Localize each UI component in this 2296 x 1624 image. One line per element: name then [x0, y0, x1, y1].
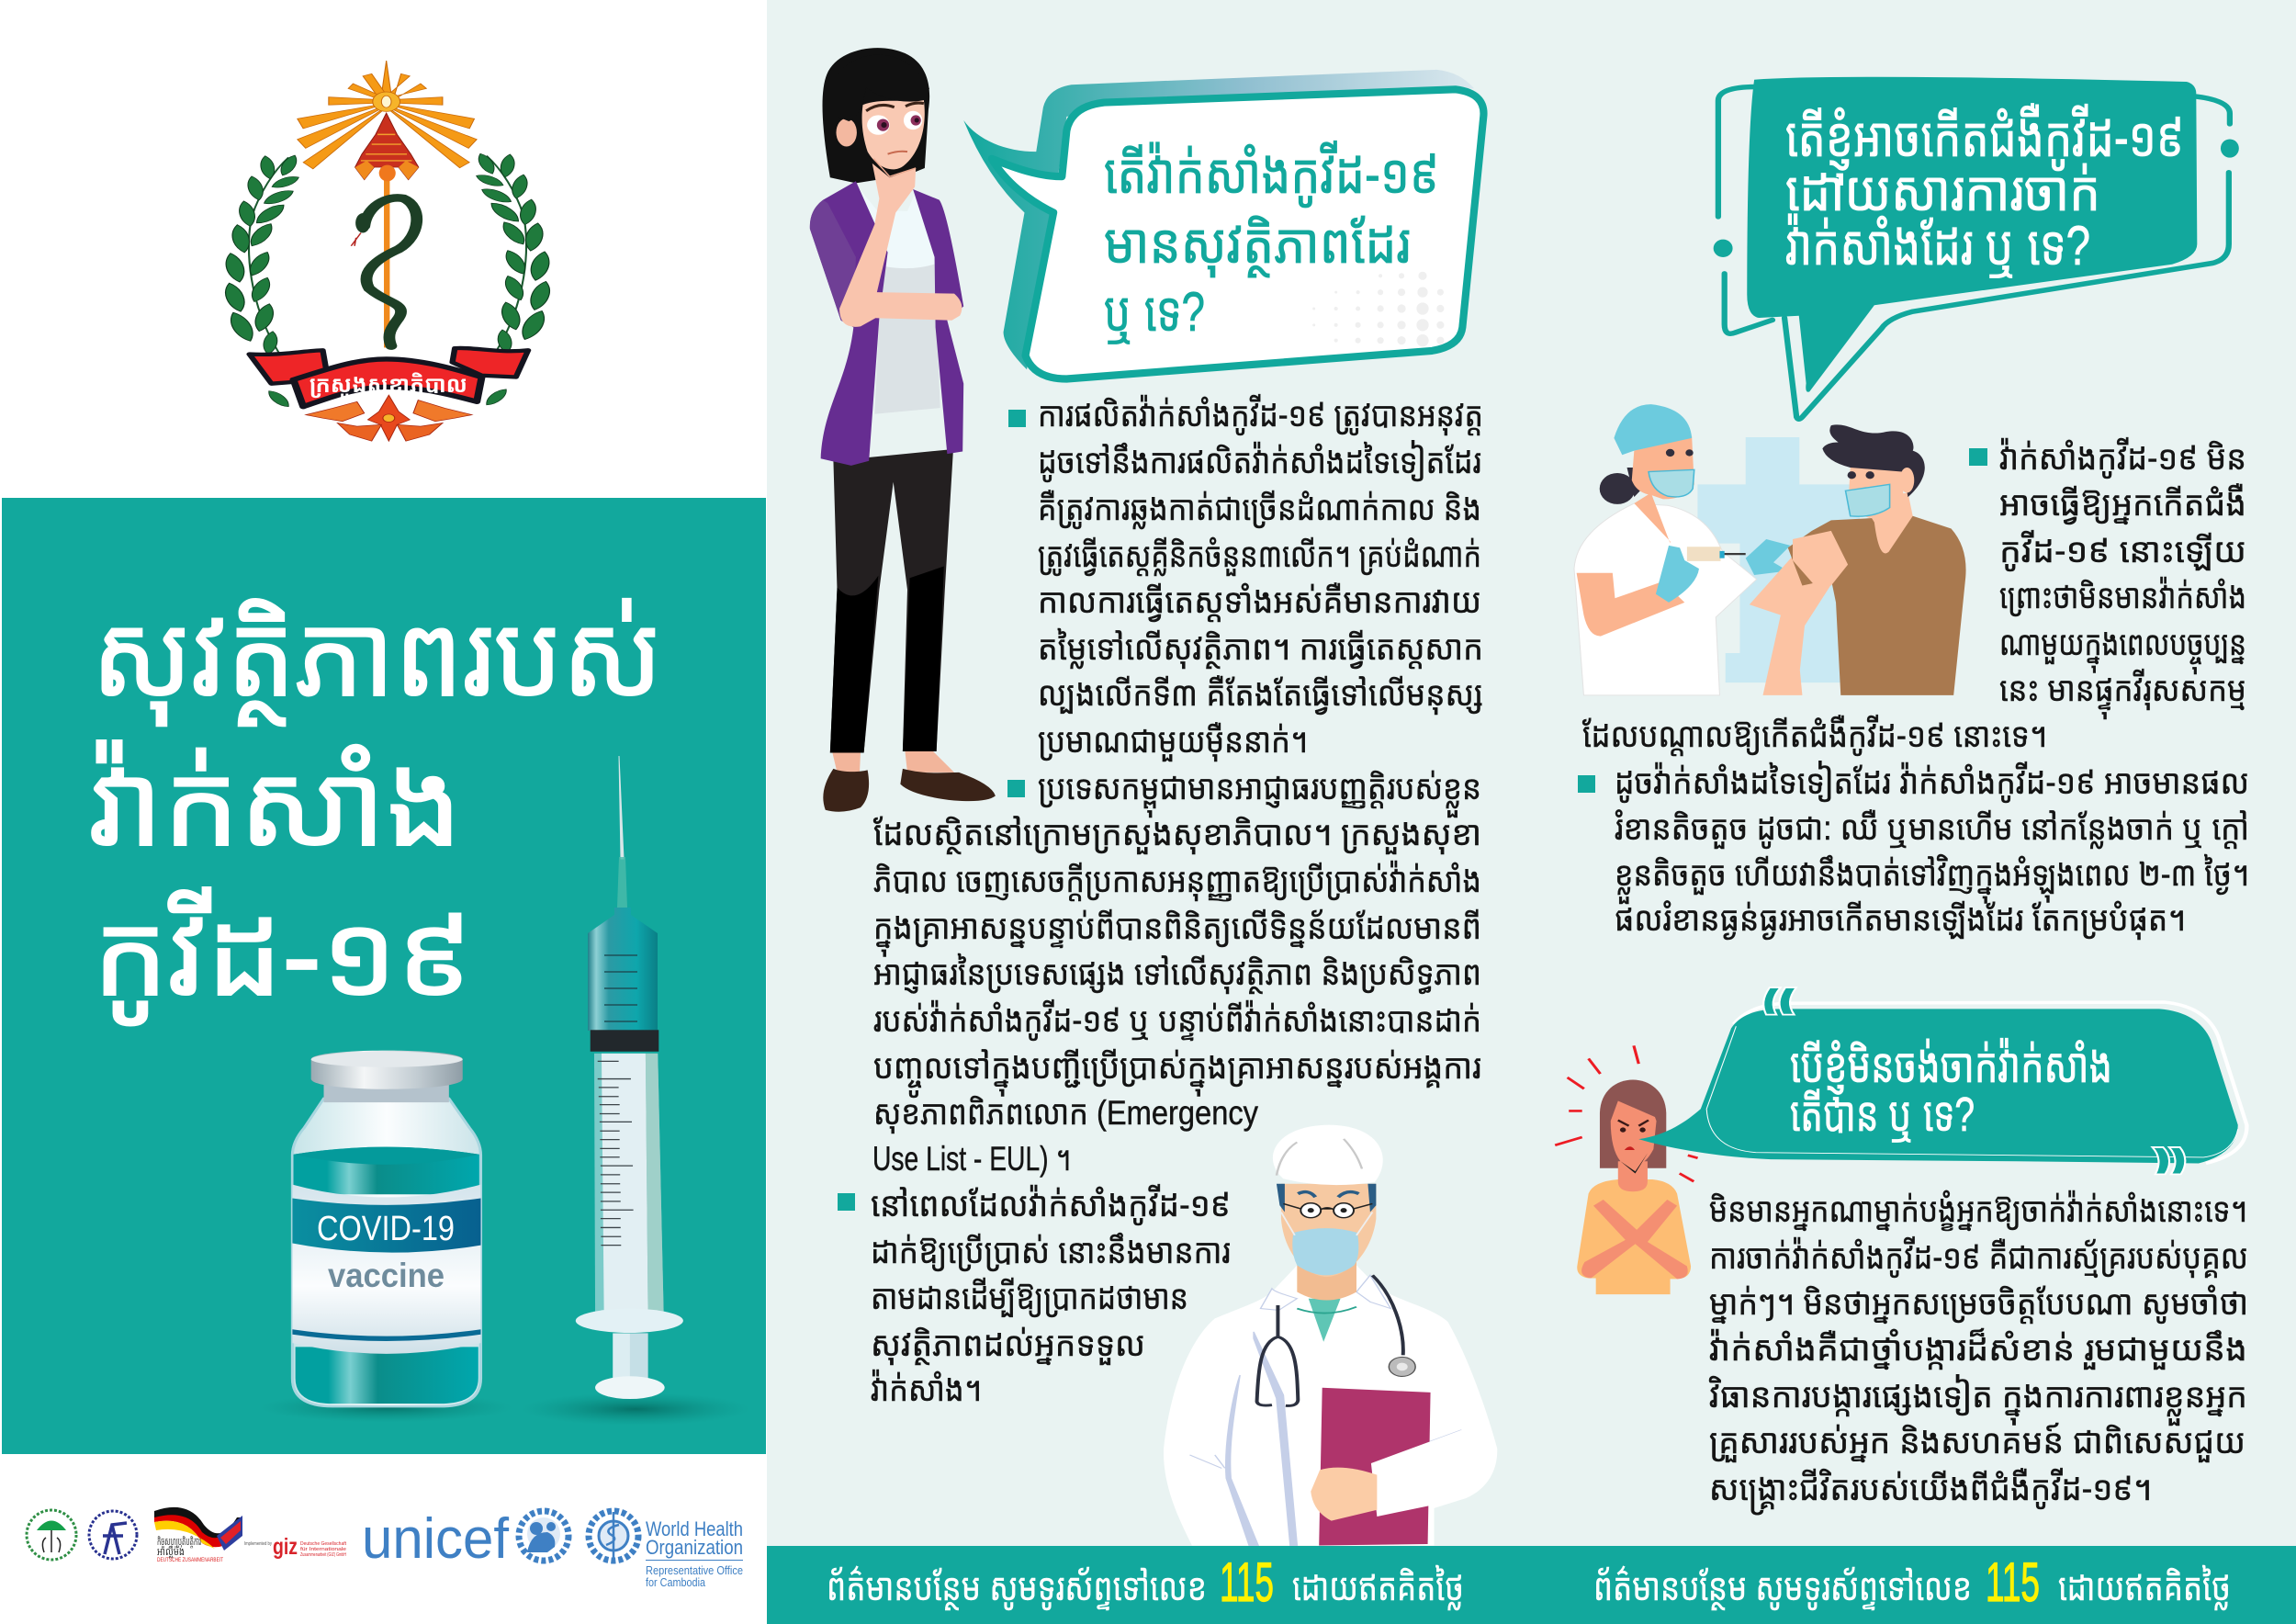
- logo: WHO: [589, 1511, 743, 1589]
- logo: WHO: World Health: [646, 1517, 743, 1540]
- hotline left: 115: [1220, 1551, 1274, 1613]
- title: [89, 593, 662, 1025]
- shirt: [856, 185, 940, 414]
- hotline left: [827, 1551, 1464, 1613]
- speech bubble: can the vaccine give me covid: [1714, 77, 2239, 419]
- clipboard: [1319, 1388, 1431, 1545]
- illustration: doctor: [1164, 1125, 1497, 1545]
- logo: Germany Cambodia flag wave: អាល្លឺម៉ង់: [157, 1544, 185, 1558]
- text block: safety paragraph 2: ភិបាល ចេញសេចក្តីប្រកាសអនុញ្ញាតឱ្យប្រើប្រាស់វ៉ាក់សាំង: [873, 861, 1481, 902]
- speech bubble: can the vaccine give me covid: ដោយសារការចាក់: [1785, 161, 2100, 222]
- speech bubble: can the vaccine give me covid: តើខ្ញុំអាចកើតជំងឺកូវីដ-១៩: [1785, 103, 2184, 185]
- icon: ribbon: [250, 348, 528, 407]
- text block: safety paragraph 1: កាលការធ្វើតេស្តទាំងអស់គឺមានការវាយ: [1038, 581, 1481, 623]
- arms: [839, 164, 962, 327]
- text block: safety paragraph 2: [872, 769, 1481, 1178]
- text block: safety paragraph 3: សុវត្ថិភាពដល់អ្នកទទួល: [871, 1325, 1145, 1366]
- quote mark top: [1763, 987, 1796, 1015]
- text block: refusal paragraph: គ្រួសាររបស់អ្នក និងសហគមន៍ ជាពិសេសជួយ: [1709, 1422, 2245, 1463]
- hotline left: ព័ត៌មានបន្ថែម សូមទូរស័ព្ទទៅលេខ: [827, 1565, 1207, 1610]
- illustration: nurse vaccinating a man: [1574, 404, 1966, 695]
- nurse: [1574, 404, 1790, 695]
- text block: covid paragraph 1: អាចធ្វើឱ្យអ្នកកើតជំងឺ: [1999, 481, 2246, 525]
- text block: safety paragraph 2: សុខភាពពិភពលោក (Emergency: [873, 1094, 1258, 1133]
- vial label text: vaccine: [328, 1257, 445, 1294]
- text block: safety paragraph 2: Use List - EUL) ។: [872, 1140, 1071, 1178]
- text block: safety paragraph 2: របស់វ៉ាក់សាំងកូវីដ-១៩ ឬ បន្ទាប់ពីវ៉ាក់សាំងនោះបានដាក់: [873, 999, 1481, 1042]
- crossed arms: [1581, 1200, 1688, 1279]
- ribbon text: ក្រសួងសុខាភិបាល: [310, 371, 467, 400]
- shoes: [823, 769, 996, 812]
- text block: covid paragraph 1: ដែលបណ្តាលឱ្យកើតជំងឺកូវីដ-១៩ នោះទេ។: [1582, 713, 2047, 757]
- icon: vaccine vial: [259, 1051, 513, 1423]
- face: [836, 55, 929, 176]
- text block: refusal paragraph: សង្គ្រោះជីវិតរបស់យើងពីជំងឺកូវីដ-១៩។: [1709, 1466, 2152, 1516]
- hand: [1371, 1430, 1474, 1517]
- legs: [830, 449, 954, 773]
- text block: refusal paragraph: វ៉ាក់សាំងគឺជាថ្នាំបង្ការដ៏សំខាន់ រួមជាមួយនឹង: [1709, 1327, 2247, 1370]
- vial label text: COVID-19: [317, 1210, 455, 1248]
- logo: Germany Cambodia flag wave: DEUTSCHE ZUSAMMENARBEIT: [157, 1558, 223, 1563]
- speech bubble: what if I do not want the vaccine: [1638, 987, 2246, 1174]
- logo: giz: Implemented by: [244, 1541, 272, 1547]
- logo: WHO: Organization: [646, 1536, 743, 1559]
- red alert ticks: [1555, 1045, 1698, 1181]
- logo: giz: giz: [273, 1534, 298, 1560]
- jacket: [810, 181, 963, 466]
- quote mark bottom: [2153, 1147, 2185, 1174]
- speech bubble: is the vaccine safe: មានសុវត្ថិភាពដែរ: [1104, 213, 1411, 278]
- text block: covid paragraph 1: [1582, 437, 2246, 757]
- hair: [823, 48, 929, 183]
- speech bubble: is the vaccine safe: ឬ ទេ?: [1104, 281, 1205, 344]
- text block: covid paragraph 2: [1578, 761, 2249, 941]
- hair: [1600, 1079, 1666, 1168]
- text block: covid paragraph 2: ដូចវ៉ាក់សាំងដទៃទៀតដែរ វ៉ាក់សាំងកូវីដ-១៩ អាចមានផល: [1615, 761, 2249, 803]
- vial label text: [317, 1210, 455, 1294]
- hotline left: ដោយឥតគិតថ្លៃ: [1292, 1565, 1464, 1611]
- title: សុវត្ថិភាពរបស់: [92, 593, 662, 727]
- speech bubble: is the vaccine safe: [963, 70, 1483, 379]
- icon: syringe: [521, 756, 750, 1426]
- text block: safety paragraph 3: តាមដានដើម្បីឱ្យប្រាកដថាមាន: [871, 1276, 1188, 1318]
- logo: giz: Zusammenarbeit (GIZ) GmbH: [300, 1552, 346, 1558]
- hotline right: ដោយឥតគិតថ្លៃ: [2058, 1565, 2231, 1611]
- speech bubble: what if I do not want the vaccine: តើបាន ឬ ទេ?: [1790, 1088, 1975, 1143]
- text block: safety paragraph 1: ល្បងលើកទី៣ គឺតែងតែធ្វើទៅលើមនុស្ស: [1038, 673, 1483, 716]
- coat: [1164, 1265, 1497, 1545]
- face and neck: [1611, 1100, 1657, 1191]
- text block: safety paragraph 3: វ៉ាក់សាំង។: [871, 1370, 982, 1408]
- icon: snake: [351, 197, 417, 346]
- text block: refusal paragraph: ម្នាក់ៗ។ មិនថាអ្នកសម្រេចចិត្តបែបណា សូមចាំថា: [1709, 1283, 2248, 1325]
- text block: safety paragraph 1: គឺត្រូវការឆ្លងកាត់ជាច្រើនដំណាក់កាល និង: [1038, 488, 1481, 530]
- text block: safety paragraph 1: តម្លៃទៅលើសុវត្ថិភាព។ ការធ្វើតេស្តសាក: [1038, 627, 1483, 670]
- panel: teal title panel: [2, 498, 766, 1454]
- text block: safety paragraph 2: អាជ្ញាធរនៃប្រទេសផ្សេង ទៅលើសុវត្ថិភាព និងប្រសិទ្ធភាព: [873, 953, 1481, 995]
- illustration: woman refusing with crossed arms: [1555, 1045, 1698, 1294]
- footer hotline band: [767, 1546, 2296, 1624]
- logo: unicef: unicef: [362, 1507, 510, 1571]
- icon: crown: [355, 113, 419, 180]
- scrub collar: [1309, 1299, 1341, 1342]
- title: កូវីដ-១៩: [93, 887, 472, 1025]
- logos row: [27, 1507, 743, 1589]
- hotline right: 115: [1986, 1551, 2040, 1613]
- logo: WHO: for Cambodia: [646, 1576, 705, 1589]
- speech bubble: what if I do not want the vaccine: បើខ្ញុំមិនចង់ចាក់វ៉ាក់សាំង: [1790, 1037, 2112, 1108]
- logo: round seal green: [27, 1510, 76, 1560]
- text block: safety paragraph 1: ដូចទៅនឹងការផលិតវ៉ាក់សាំងដទៃទៀតដែរ: [1038, 440, 1481, 482]
- stethoscope: [1257, 1275, 1403, 1405]
- text block: safety paragraph 3: នៅពេលដែលវ៉ាក់សាំងកូវីដ-១៩: [871, 1184, 1231, 1225]
- icon: staff: [379, 165, 396, 347]
- text block: refusal paragraph: [1709, 1189, 2248, 1516]
- icon: sun rays: [298, 61, 477, 169]
- text block: safety paragraph 3: ដាក់ឱ្យប្រើប្រាស់ នោះនឹងមានការ: [871, 1231, 1231, 1272]
- speech bubble: is the vaccine safe: តើវ៉ាក់សាំងកូវីដ-១៩: [1104, 141, 1439, 209]
- logo: WHO: Representative Office: [646, 1564, 743, 1577]
- icon: floral ornament: [306, 395, 472, 441]
- title: វ៉ាក់សាំង: [89, 740, 462, 870]
- text block: safety paragraph 2: ក្នុងគ្រាអាសន្នបន្ទាប់ពីបានពិនិត្យលើទិន្នន័យដែលមានពី: [873, 908, 1481, 957]
- text block: covid paragraph 1: ព្រោះថាមិនមានវ៉ាក់សាំង: [1999, 577, 2246, 617]
- hotline right: [1593, 1551, 2231, 1613]
- illustration: thinking woman: [810, 48, 996, 812]
- text block: safety paragraph 1: ការផលិតវ៉ាក់សាំងកូវីដ-១៩ ត្រូវបានអនុវត្ត: [1038, 394, 1483, 436]
- logo: Germany Cambodia flag wave: កិច្ចសហប្រតិបត្តិការ: [157, 1535, 201, 1548]
- icon: left laurel: [221, 153, 301, 409]
- logo: round seal blue: [89, 1511, 137, 1559]
- text block: safety paragraph 3: [838, 1184, 1231, 1408]
- logo: giz: [244, 1534, 347, 1560]
- man: [1750, 424, 1966, 695]
- text block: covid paragraph 2: រំខានតិចតួច ដូចជា: ឈឺ ឬមានហើម នៅកន្លែងចាក់ ឬ ក្តៅ: [1615, 807, 2249, 850]
- text block: safety paragraph 2: បញ្ចូលទៅក្នុងបញ្ជីប្រើប្រាស់ក្នុងគ្រាអាសន្នរបស់អង្គការ: [873, 1047, 1481, 1098]
- logo: giz: für Internationale: [300, 1547, 346, 1552]
- text block: safety paragraph 1: ប្រមាណជាមួយម៉ឺននាក់។: [1038, 720, 1308, 761]
- text block: covid paragraph 1: នេះ មានផ្ទុកវីរុសសកម្ម: [1999, 669, 2246, 719]
- panel: ministry of health emblem: [221, 61, 554, 441]
- text block: covid paragraph 1: កូវីដ-១៩ នោះឡើយ: [1999, 530, 2246, 571]
- body: [1577, 1179, 1691, 1294]
- text block: safety paragraph 1: [1008, 394, 1483, 761]
- text block: refusal paragraph: វិធានការបង្ការផ្សេងទៀត ក្នុងការការពារខ្លួនអ្នក: [1709, 1374, 2247, 1426]
- speech bubble: can the vaccine give me covid: វ៉ាក់សាំងដែរ ឬ ទេ?: [1785, 214, 2090, 278]
- hotline right: ព័ត៌មានបន្ថែម សូមទូរស័ព្ទទៅលេខ: [1593, 1565, 1972, 1610]
- text block: safety paragraph 2: ដែលស្ថិតនៅក្រោមក្រសួងសុខាភិបាល។ ក្រសួងសុខា: [873, 815, 1481, 855]
- head: [1273, 1125, 1383, 1301]
- icon: right laurel: [474, 152, 554, 408]
- logo: Germany Cambodia flag wave: [154, 1507, 242, 1563]
- text block: covid paragraph 2: ផលរំខានធ្ងន់ធ្ងរអាចកើតមានឡើងដែរ តែកម្របំផុត។: [1615, 899, 2186, 941]
- medical cross background: [1697, 437, 1860, 682]
- text block: covid paragraph 1: វ៉ាក់សាំងកូវីដ-១៩ មិន: [1999, 437, 2246, 479]
- text block: safety paragraph 2: ប្រទេសកម្ពុជាមានអាជ្ញាធរបញ្ញត្តិរបស់ខ្លួន: [1038, 769, 1481, 818]
- logo: giz: Deutsche Gesellschaft: [300, 1541, 347, 1547]
- text block: safety paragraph 1: ត្រូវធ្វើតេស្តគ្លីនិកចំនួន៣លើក។ គ្រប់ដំណាក់: [1038, 536, 1481, 577]
